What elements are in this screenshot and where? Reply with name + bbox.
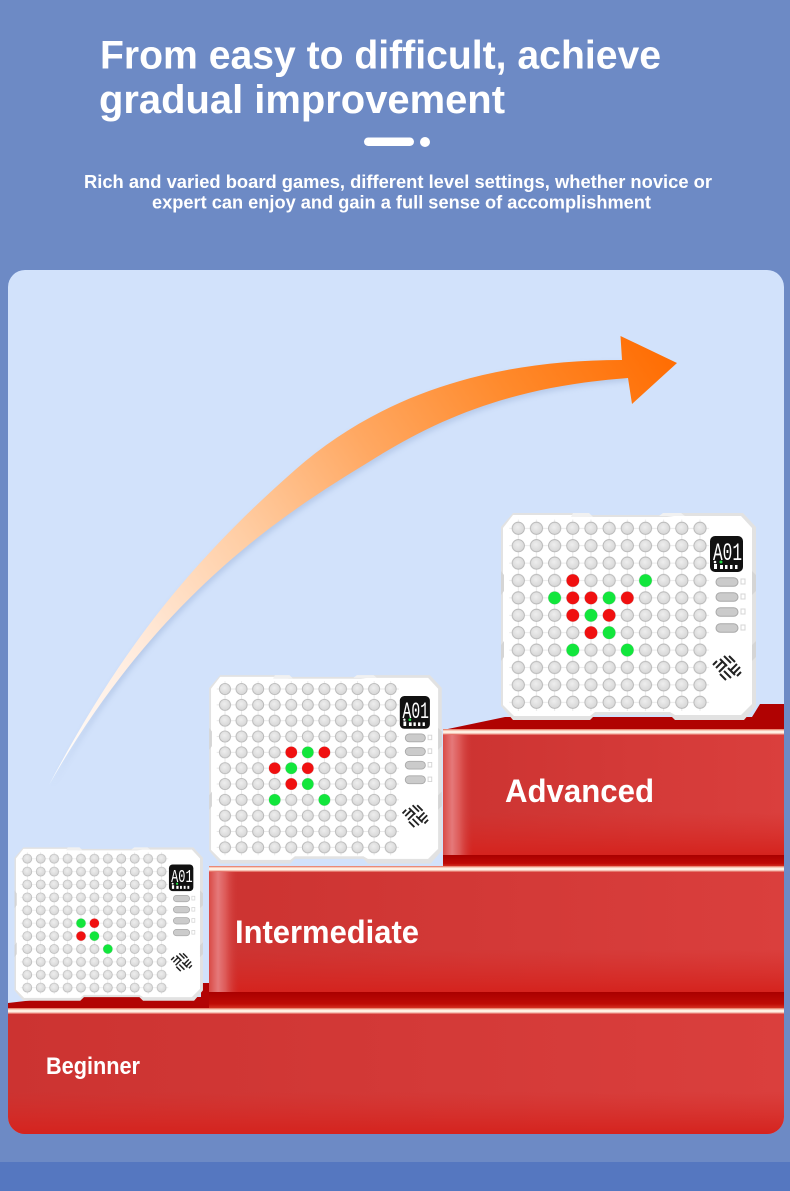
display readout: A01 <box>713 539 742 568</box>
device: beginner <box>14 847 203 1001</box>
device: intermediate <box>209 675 442 863</box>
subtitle <box>84 171 712 212</box>
step: advanced <box>443 704 784 867</box>
display readout: A01 <box>171 867 193 888</box>
label: intermediate: Intermediate <box>235 914 419 950</box>
subtitle: Rich and varied board games, different level settings, whether novice or <box>84 171 712 192</box>
arrow: rising progress <box>49 336 677 788</box>
device: advanced <box>501 513 756 720</box>
title: From easy to difficult, achieve <box>100 34 661 78</box>
subtitle: expert can enjoy and gain a full sense of accomplishment <box>152 192 651 212</box>
display readout: A01 <box>403 699 429 725</box>
label: beginner: Beginner <box>46 1053 140 1080</box>
title: gradual improvement <box>99 78 505 122</box>
title <box>99 34 661 122</box>
step: intermediate <box>209 866 784 1009</box>
panel: staircase <box>8 270 784 1134</box>
label: advanced: Advanced <box>505 773 654 809</box>
bottom band <box>0 1162 790 1191</box>
title accent: pill and dot <box>364 137 430 147</box>
step: beginner <box>8 983 784 1134</box>
